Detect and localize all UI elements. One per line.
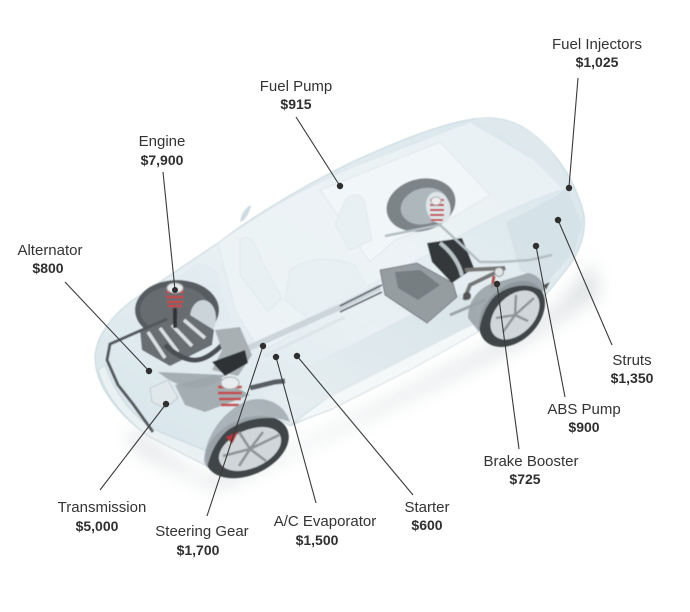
label: Struts: $1,350 bbox=[611, 370, 654, 386]
front wheel bbox=[195, 399, 299, 490]
label: Starter: $600 bbox=[411, 517, 443, 533]
fuel tank bbox=[380, 263, 457, 323]
front right spring bbox=[166, 283, 184, 328]
coolant reservoir bbox=[150, 380, 178, 408]
lower engine parts bbox=[175, 375, 250, 412]
front rim spokes bbox=[223, 432, 279, 466]
label: Transmission bbox=[58, 499, 146, 534]
label: Struts: Struts bbox=[612, 352, 652, 369]
label: Fuel Injectors: Fuel Injectors bbox=[552, 36, 642, 53]
label: Steering Gear: $1,700 bbox=[177, 542, 220, 558]
hood bbox=[100, 262, 230, 365]
label: ABS Pump bbox=[547, 401, 621, 435]
label: Alternator bbox=[17, 242, 83, 276]
label: Fuel Pump: $915 bbox=[280, 96, 312, 112]
car illustration bbox=[95, 118, 584, 490]
front rim bbox=[212, 418, 288, 480]
brake caliper bbox=[226, 432, 238, 444]
label: Engine: $7,900 bbox=[141, 152, 184, 168]
leader line: Fuel Pump bbox=[296, 117, 343, 189]
label: Alternator: $800 bbox=[32, 260, 64, 276]
tank highlights bbox=[395, 270, 440, 300]
leader line: Struts bbox=[555, 217, 612, 345]
mirror bbox=[240, 205, 251, 222]
rear subframe bbox=[385, 225, 552, 315]
rear fender bbox=[468, 273, 544, 332]
label: Fuel Injectors bbox=[552, 36, 642, 70]
rear tyre bbox=[466, 268, 558, 360]
tailgate window bbox=[475, 118, 564, 190]
roof highlight bbox=[320, 142, 490, 262]
inner rear wheel bbox=[380, 171, 462, 239]
car body shell bbox=[95, 118, 584, 465]
radiator tube frame bbox=[107, 319, 167, 432]
leader line: Fuel Injectors bbox=[566, 78, 578, 191]
front steering arm bbox=[250, 381, 285, 388]
label: Transmission: $5,000 bbox=[76, 518, 119, 534]
label: ABS Pump: ABS Pump bbox=[547, 401, 621, 418]
windshield and cabin glass bbox=[218, 122, 567, 352]
leader line: Engine bbox=[163, 172, 178, 293]
label: A/C Evaporator: A/C Evaporator bbox=[274, 513, 376, 530]
rear wheel bbox=[466, 268, 558, 360]
tail light bbox=[543, 282, 550, 290]
label: Alternator: Alternator bbox=[17, 242, 83, 259]
rear spring bbox=[430, 197, 444, 220]
engine block bbox=[140, 315, 225, 388]
front left spring bbox=[218, 377, 242, 405]
leader line: Steering Gear bbox=[207, 343, 266, 516]
leader line: A/C Evaporator bbox=[273, 354, 316, 503]
leader line: Transmission bbox=[100, 401, 169, 490]
label: Transmission: Transmission bbox=[58, 499, 146, 516]
label: A/C Evaporator bbox=[274, 513, 376, 548]
label: Fuel Pump: Fuel Pump bbox=[260, 78, 332, 95]
label: Fuel Pump bbox=[260, 78, 332, 112]
lower sill bbox=[292, 322, 478, 424]
rear rim bbox=[481, 281, 549, 349]
front fender bbox=[204, 399, 290, 468]
label: Engine: Engine bbox=[139, 133, 185, 150]
label: Steering Gear: Steering Gear bbox=[155, 523, 249, 540]
label: Brake Booster bbox=[483, 453, 579, 487]
leader line: Alternator bbox=[65, 282, 152, 374]
label: ABS Pump: $900 bbox=[568, 419, 600, 435]
front tyre bbox=[195, 404, 299, 490]
label: A/C Evaporator: $1,500 bbox=[296, 532, 339, 548]
front door side bbox=[262, 290, 478, 424]
inner front wheel bbox=[135, 280, 219, 340]
leader line: Starter bbox=[294, 353, 413, 495]
label: Struts bbox=[611, 352, 654, 386]
leader line: Brake Booster bbox=[494, 281, 519, 449]
rear door side panel bbox=[506, 188, 582, 285]
label: Engine bbox=[139, 133, 185, 168]
bumper front bbox=[98, 365, 209, 465]
label: Brake Booster: $725 bbox=[509, 471, 541, 487]
label: Starter: Starter bbox=[404, 499, 450, 516]
leader line: ABS Pump bbox=[533, 243, 565, 397]
seat shapes bbox=[240, 195, 372, 320]
label: Brake Booster: Brake Booster bbox=[483, 453, 579, 470]
ground shadow bbox=[125, 262, 600, 490]
label: Starter bbox=[404, 499, 450, 533]
label: Steering Gear bbox=[155, 523, 249, 558]
label: Fuel Injectors: $1,025 bbox=[576, 54, 619, 70]
transmission housing bbox=[212, 327, 252, 376]
propeller shaft bbox=[240, 285, 382, 356]
rear rim spokes bbox=[496, 295, 534, 332]
